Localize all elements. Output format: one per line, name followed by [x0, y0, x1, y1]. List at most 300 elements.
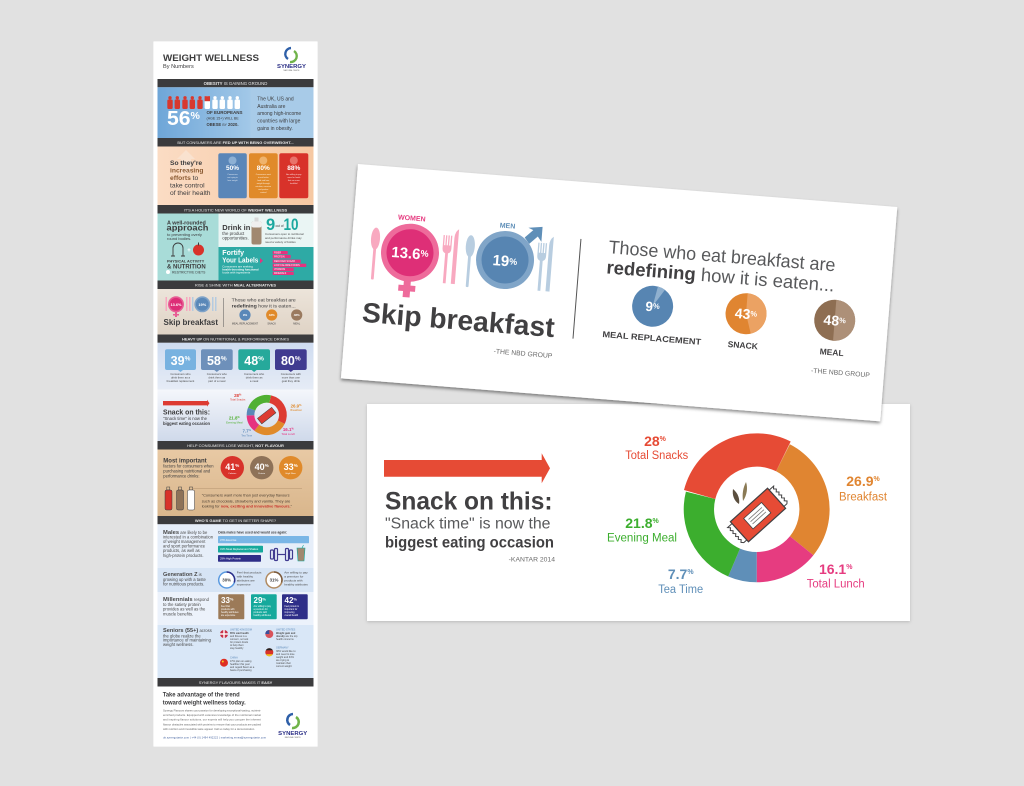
card: 50 percent: [218, 153, 247, 198]
label: evening meal: [607, 515, 677, 545]
stat box: 48 percent: [238, 349, 270, 383]
ring: 31 percent: [266, 572, 282, 588]
text: nine out of ten detail: need a variety of bottles: [265, 240, 296, 244]
text: millennials: to the satiety protein: [163, 602, 201, 607]
text: males: high-protein products.: [163, 553, 204, 558]
stat box: 33 percent: products with: [221, 608, 235, 611]
labels: snack shares: %: [249, 428, 252, 432]
card: 50 percent: lose weight: [227, 179, 238, 182]
bar chart: male product use: 29% High Protein: [220, 556, 241, 560]
stat: 41 percent: 41: [225, 462, 235, 472]
labels: snack shares: %: [239, 392, 242, 396]
stat: 40 percent: Protein: [258, 472, 266, 475]
icon: snack bar: [726, 482, 790, 546]
stat: 33 percent: %: [294, 463, 298, 468]
stat box: 33 percent: [218, 594, 244, 619]
text: high-income countries: Australia are: [257, 104, 286, 110]
panel: generation z: products with: [284, 579, 303, 583]
stat box: 58 percent: %: [221, 356, 227, 362]
mini stats: breakfast types: 48%: [294, 313, 300, 317]
panel: generation z: a premium for: [284, 574, 303, 578]
text: fortify your labels: [222, 250, 259, 274]
heading: those who eat breakfast: Those who eat breakfast are: [608, 236, 836, 275]
label: tea time: Tea Time: [658, 584, 703, 596]
text: seniors: Seniors (55+) across: [163, 628, 212, 634]
text: snack on this: Snack on this:: [163, 407, 210, 416]
text: redefining: redefining how it is eaten...: [232, 303, 296, 309]
label: breakfast: Breakfast: [839, 492, 888, 504]
heading bar: who's game: [158, 516, 314, 524]
heading bar: meal alternatives: RISE & SHINE WITH MEAL ALTERNATIVES: [195, 283, 276, 288]
card: 80 percent: [249, 153, 278, 198]
text: synergy paragraph: [163, 709, 262, 731]
flag: germany: current weight: [276, 665, 292, 668]
poster title: [163, 53, 260, 70]
text: of europeans: OF EUROPEANS: [206, 110, 243, 115]
stat box: 33 percent: %: [230, 596, 234, 602]
card: 80 percent: weight through: [257, 182, 270, 185]
heading bar: holistic: [158, 205, 314, 214]
segment: evening meal: [684, 492, 740, 576]
label: evening meal: 21.8: [625, 515, 653, 531]
text: drink in: Drink in: [222, 223, 251, 232]
women symbol: 13.6: [391, 244, 421, 263]
mini chart: women skip breakfast: 13.6%: [170, 302, 182, 307]
stat box: 39 percent: %: [185, 356, 191, 362]
stat: meal replacement: [602, 282, 706, 347]
text: drink in: [222, 223, 251, 240]
panel: holistic approach: A well-rounded: [167, 220, 206, 226]
panel: generation z: attributes are: [237, 579, 255, 583]
panel: holistic approach: +: [187, 248, 191, 254]
heading: those who eat breakfast: redefining how it is eaten...: [606, 256, 835, 296]
stat: snack: 43: [734, 305, 751, 322]
text: males: products, as well as: [163, 548, 200, 553]
text: increasing efforts: efforts to: [170, 175, 199, 182]
stat box: 42 percent: overall health: [284, 614, 299, 617]
heading: take advantage: Take advantage of the trend: [163, 692, 240, 699]
label: total lunch: 16.1: [819, 561, 846, 577]
flag: china: and regard flavor as a: [230, 666, 255, 669]
text: high-income countries: gains in obesity.: [257, 126, 293, 132]
card: 80 percent: to eat better: [258, 176, 269, 179]
text: of europeans: (AGE 15+) WILL BE: [206, 116, 239, 120]
card: 88 percent: [279, 153, 308, 198]
stat: snack: SNACK: [727, 339, 759, 351]
labels: snack shares: 7.7: [242, 428, 249, 433]
icon: jump rope: [171, 243, 185, 256]
text: high-income countries: [257, 96, 301, 132]
text: high-income countries: The UK, US and: [257, 96, 294, 102]
heading bar: heavy up: HEAVY UP ON NUTRITIONAL & PERFORMANCE DRINKS: [182, 336, 289, 342]
stat box: 29 percent: %: [262, 596, 266, 602]
bar chart: male product use: 37% Exercise: [220, 538, 237, 542]
text: snack on this: "Snack time" is now the: [163, 416, 208, 421]
stat box: 80 percent: goal they drink: [282, 379, 300, 383]
stat: meal replacement: 9: [645, 299, 654, 314]
panel: snack section: Breakfast: [290, 408, 302, 412]
stat: meal replacement: MEAL REPLACEMENT: [602, 329, 702, 347]
card: 80 percent: and portion: [258, 188, 268, 191]
flag: uk: and fitness is a: [230, 635, 247, 638]
text: fortify your labels: health-boosting functional: [222, 268, 259, 272]
panel: snack section: [158, 390, 314, 441]
panel: snack section: Tea Time: [241, 434, 253, 438]
stat: meal: MEAL: [819, 346, 844, 358]
heading: take advantage: toward weight wellness today.: [163, 699, 246, 706]
text: generation z: growing up with a taste: [163, 577, 207, 582]
arrow: snack arrow: [384, 453, 550, 483]
heading bar: synergy flavours: [158, 678, 314, 686]
card: 80 percent: Consumers want: [256, 173, 271, 176]
flag: germany: and need to lose: [276, 653, 295, 656]
text: nine out of ten detail: Consumers open to nutritional: [265, 232, 304, 236]
icon: pink pointer: [260, 258, 263, 263]
text: consumer quote: [202, 493, 293, 508]
text: millennials: [163, 597, 210, 616]
text: increasing efforts: take control: [170, 182, 205, 189]
flag: china: 47% plan on eating: [230, 660, 252, 663]
label: total lunch: [807, 561, 865, 591]
text: synergy paragraph: with nutrition and irresistible taste appeal. Call us today for a demonstration.: [163, 727, 255, 731]
text: synergy paragraph: enriched products. Equipped with extensive knowledge of the nutritional market: [163, 713, 261, 717]
card: 88 percent: 88%: [287, 165, 301, 172]
text: most important: purchasing nutritional and: [163, 468, 211, 473]
flag: uk: UNITED KINGDOM: [230, 628, 252, 632]
icon: blue cutlery left: [463, 235, 476, 287]
heading bar: lose weight: [158, 441, 314, 450]
label: breakfast: 26.9: [846, 473, 874, 489]
text: fortify your labels: Consumers are seeking: [222, 265, 253, 269]
stat box: 80 percent: Consumers with: [281, 372, 301, 376]
heading bar: obesity: [158, 79, 314, 87]
label: total snacks: 28: [644, 433, 660, 449]
flag: germany: [265, 646, 296, 668]
card: 88 percent: that are more: [288, 179, 301, 182]
icon: small snack bar: [257, 407, 276, 424]
stat box: 33 percent: healthy attributes: [221, 611, 239, 614]
logo: synergy: [277, 48, 306, 72]
panel: snack section: Total Lunch: [281, 432, 296, 436]
poster title: WEIGHT WELLNESS: [163, 53, 260, 64]
stat box: 58 percent: 58: [207, 354, 221, 368]
heading: snack on this: Snack on this:: [385, 487, 552, 515]
stat box: 58 percent: part of a meal: [208, 379, 226, 383]
text: consumer quote: "Consumers want more than just everyday flavours: [202, 493, 290, 498]
stat box: 42 percent: %: [293, 596, 297, 602]
stat: snack: [723, 292, 768, 352]
stat box: 39 percent: Consumers who: [170, 372, 191, 376]
stat: 41 percent: Calories: [228, 472, 237, 475]
women symbol: WOMEN: [398, 214, 426, 224]
panel: generation z: [158, 568, 314, 592]
panel: generation z: Are willing to pay: [284, 570, 308, 574]
text: of europeans: OBESE BY 2020.: [206, 122, 239, 127]
panel: generation z: expensive: [237, 583, 251, 587]
mini stats: breakfast types: [232, 309, 302, 325]
icon: pink fork and knife: [440, 228, 459, 284]
flag: uk: [220, 628, 252, 650]
logo: synergy footer: NATURAL TASTE: [285, 736, 301, 739]
text: snack on this: [163, 407, 210, 426]
men symbol: 19: [492, 252, 510, 270]
ring: 30 percent: [219, 572, 235, 588]
mini stats: breakfast types: MEAL: [293, 322, 301, 325]
stat box: 48 percent: 48: [244, 354, 258, 368]
label: tea time: [658, 566, 703, 596]
flag: uk: stay healthy: [230, 647, 244, 650]
stat: 40 percent: [250, 456, 273, 479]
stat: 40 percent: 40: [255, 462, 265, 472]
text: drink in: the product: [222, 231, 245, 236]
arrow: red: [163, 400, 210, 407]
women symbol: %: [420, 248, 429, 259]
heading bar: obesity: OBESITY IS GAINING GROUND: [204, 81, 267, 86]
icon: dumbbell: [270, 548, 292, 560]
mini chart: men skip breakfast: [192, 296, 216, 312]
labels: snack shares: %: [291, 426, 294, 430]
mini stats: breakfast types: 9%: [243, 313, 247, 317]
card: 50 percent: Consumers: [227, 174, 238, 176]
panel: males: Data males have used and would use again:: [218, 531, 287, 535]
text: biggest eating occasion: biggest eating occasion: [385, 534, 554, 551]
text: redefining: Those who eat breakfast are: [232, 298, 296, 304]
text: redefining: [232, 298, 296, 309]
text: consumer quote: looking for new, exciting and innovative flavours.": [202, 503, 293, 508]
heading bar: synergy flavours: SYNERGY FLAVOURS MAKES IT EASY: [199, 680, 273, 685]
labels: snack shares: %: [237, 415, 240, 419]
ring: 31 percent: 31%: [270, 578, 278, 582]
label: breakfast: [839, 473, 888, 504]
text: seniors: the globe realize the: [163, 633, 201, 638]
card: 50 percent: 50%: [226, 165, 239, 172]
stat box: 42 percent: [282, 594, 308, 619]
card: 80 percent: control: [260, 191, 267, 194]
heading bar: fed up: BUT CONSUMERS ARE FED UP WITH BEING OVERWEIGHT...: [177, 140, 294, 145]
text: generation z: Generation Z is: [163, 572, 202, 578]
stat box: 58 percent: Consumers who: [207, 372, 227, 376]
segment: breakfast: [776, 444, 830, 555]
panel: generation z: with healthy: [237, 574, 253, 578]
label: total snacks: %: [660, 436, 667, 443]
stat: 9 out of 10: out of: [276, 224, 284, 228]
stat box: 29 percent: [251, 594, 277, 619]
panel: weight wellness poster: [153, 41, 318, 747]
panel: increasing efforts: [158, 146, 314, 205]
text: generation z: for nutritious products.: [163, 582, 204, 587]
label: tea time: 7.7: [668, 566, 687, 582]
text: skip breakfast: Skip breakfast: [164, 318, 218, 327]
text: drink in: opportunities.: [222, 236, 249, 240]
text: high-income countries: countries with large: [257, 118, 301, 124]
stat box: 29 percent: 29: [254, 596, 262, 605]
text: contact line: uk.synergytaste.com | +44 (0) 1494 492222 | marketing.emea@synergytaste.com: [163, 735, 266, 739]
stat box: 39 percent: [165, 349, 196, 383]
flag: china: CHINA: [230, 656, 238, 660]
donut: snack shares: [247, 395, 286, 435]
stat: 41 percent: %: [235, 463, 239, 468]
card: 80 percent: 80%: [257, 165, 270, 172]
icon: shake bottles: [165, 487, 194, 510]
flag: germany: are trying to: [276, 659, 290, 662]
card: 50 percent: are trying to: [227, 176, 239, 179]
text: snack on this: biggest eating occasion: [163, 421, 210, 426]
stat: meal replacement: %: [653, 301, 660, 311]
stat box: 80 percent: [275, 349, 307, 383]
card: 88 percent: Are willing to pay: [286, 173, 301, 176]
stat box: 33 percent: are expensive: [221, 614, 236, 617]
panel: seniors: [158, 625, 314, 678]
panel: holistic approach: approach: [166, 222, 208, 232]
icon: blue fork and knife: [535, 236, 554, 292]
text: increasing efforts: [170, 160, 211, 197]
labels: snack shares: 21.8: [229, 415, 237, 420]
text: of europeans: [206, 110, 243, 127]
stat box: 48 percent: a meal: [250, 379, 259, 383]
ring: 30 percent: 30%: [222, 578, 231, 582]
text: consumer quote: such as chocolate, strawberry and vanilla. They are: [202, 498, 290, 503]
stat box: 39 percent: 39: [171, 354, 185, 368]
source: nbd group right: -THE NBD GROUP: [811, 368, 871, 379]
stat: 9 out of 10: 10: [284, 216, 298, 234]
logo: synergy: SYNERGY: [277, 64, 306, 70]
labels: snack shares: [229, 392, 302, 433]
flag: germany: GERMANY: [276, 646, 289, 650]
panel: snack section: Evening Meal: [226, 420, 243, 424]
men symbol: %: [509, 256, 518, 267]
flag: germany: maintain their: [276, 662, 291, 665]
flag: china: healthier this year: [230, 663, 250, 666]
label: evening meal: Evening Meal: [607, 533, 677, 545]
heading bar: holistic: IT'S A HOLISTIC NEW WORLD OF WEIGHT WELLNESS: [184, 207, 288, 212]
text: increasing efforts: increasing: [170, 167, 203, 174]
stat box: 39 percent: drink them as a: [171, 376, 191, 380]
label: total lunch: %: [846, 564, 853, 571]
label: total snacks: [625, 433, 688, 462]
panel: rise and shine: [158, 289, 314, 334]
text: seniors: [163, 628, 212, 647]
text: seniors: importance of maintaining: [163, 638, 212, 643]
segment: total snacks: [684, 433, 791, 499]
label: evening meal: %: [653, 518, 660, 525]
text: synergy paragraph: Synergy Flavours shares your passion for developing exceptional-tasting, nutrient-: [163, 709, 261, 713]
text: synergy paragraph: flavour obstacles associated with proteins to ensure that your products are packed: [163, 723, 262, 727]
stat box: 80 percent: more than one: [282, 376, 300, 380]
footer: call to action: [163, 692, 308, 739]
stat box: 48 percent: %: [258, 356, 264, 362]
flag: usa: health concerns: [276, 638, 294, 641]
mini stats: breakfast types: 43%: [269, 313, 275, 317]
stat box: 80 percent: %: [295, 356, 301, 362]
stat box: 42 percent: Feel protein is: [284, 605, 300, 608]
stat box: 42 percent: 42: [284, 596, 293, 605]
text: fortify your labels: foods with ingredients: [222, 270, 251, 274]
heading bar: meal alternatives: [158, 280, 314, 289]
mini chart: men skip breakfast: 19%: [198, 302, 207, 307]
text: increasing efforts: So they're: [170, 160, 202, 167]
segment: tea time: [728, 549, 757, 582]
stat box: 39 percent: breakfast replacement: [167, 379, 195, 383]
segment: total lunch: [757, 536, 813, 582]
stat: 56 percent: %: [191, 111, 200, 122]
icon: bottle: [252, 218, 262, 244]
stat box: 33 percent: 33: [221, 596, 230, 605]
stat box: 33 percent: Feel that: [221, 605, 230, 608]
heading: skip breakfast: Skip breakfast: [361, 297, 556, 343]
stat: snack: %: [750, 309, 758, 319]
text: males: of weight management: [163, 539, 206, 544]
flag: germany: weight and 34%: [276, 656, 295, 659]
card: 80 percent: nutrition, exercise: [255, 185, 272, 188]
heading: take advantage: [163, 692, 246, 706]
stat box: 58 percent: drink them as: [208, 376, 226, 380]
text: millennials: muscle benefits.: [163, 611, 193, 616]
flag: usa: obesity are the top: [276, 635, 298, 638]
flag: china: basis of purchasing: [230, 669, 252, 672]
panel: holistic approach: & NUTRITION: [167, 264, 206, 270]
donut chart: eating occasions: [684, 433, 830, 582]
stat box: 58 percent: [201, 349, 233, 383]
card: 88 percent: healthful: [290, 182, 298, 185]
flag: uk: 65% said health: [230, 632, 249, 635]
flag: uk: for protein foods: [230, 641, 249, 644]
icon: pink cutlery left: [368, 227, 381, 280]
flag: usa: [265, 628, 298, 641]
text: fortify your labels: Your Labels: [222, 257, 258, 264]
panel: nutritional drinks: [158, 343, 314, 390]
stat: 41 percent: [221, 456, 244, 479]
logo: synergy footer: SYNERGY: [278, 731, 308, 737]
panel: snack card: [367, 404, 910, 621]
tag list: label claims: [273, 251, 306, 275]
stat: 33 percent: [279, 456, 302, 479]
flag: germany: 38% would like to: [276, 650, 296, 653]
poster title: By Numbers: [163, 64, 194, 70]
stat: 9 out of 10: 9: [266, 216, 275, 234]
panel: holistic approach: round bodies.: [167, 236, 191, 241]
text: nine out of ten detail: [265, 232, 304, 244]
stat box: 42 percent: important for: [284, 608, 298, 611]
labels: snack shares: 28: [234, 393, 239, 398]
women symbol: [378, 213, 442, 300]
icon: shake cup: [297, 545, 305, 561]
label: breakfast: %: [874, 476, 881, 483]
tag list: label claims: LOW CALORIE FOODS: [274, 264, 300, 267]
panel: holistic approach: to preventing overly: [167, 232, 202, 237]
mini stats: breakfast types: MEAL REPLACEMENT: [232, 322, 259, 325]
heading: those who eat breakfast: [606, 236, 837, 296]
text: seniors: weight wellness.: [163, 642, 194, 647]
text: millennials: provides as well as the: [163, 607, 206, 612]
panel: millennials: [158, 592, 314, 625]
text: most important: performance drinks:: [163, 473, 199, 478]
stat box: 48 percent: drink them as: [246, 376, 263, 380]
text: most important: factors for consumers when: [163, 464, 214, 469]
label: total snacks: Total Snacks: [625, 450, 688, 462]
label: tea time: %: [687, 569, 694, 576]
arrow: up: [177, 150, 195, 173]
tag list: label claims: REDUCED SUGAR: [274, 260, 295, 263]
mini stats: breakfast types: SNACK: [267, 322, 276, 325]
logo: synergy: NATURAL TASTE: [284, 69, 300, 72]
stat box: 80 percent: 80: [281, 354, 295, 368]
men symbol: MEN: [499, 222, 516, 231]
bar chart: male product use: [218, 536, 309, 562]
panel: holistic approach: [158, 214, 314, 280]
panel: lose weight not flavour: [158, 450, 314, 516]
labels: snack shares: 26.9: [291, 403, 299, 408]
flag: china: [220, 656, 255, 672]
